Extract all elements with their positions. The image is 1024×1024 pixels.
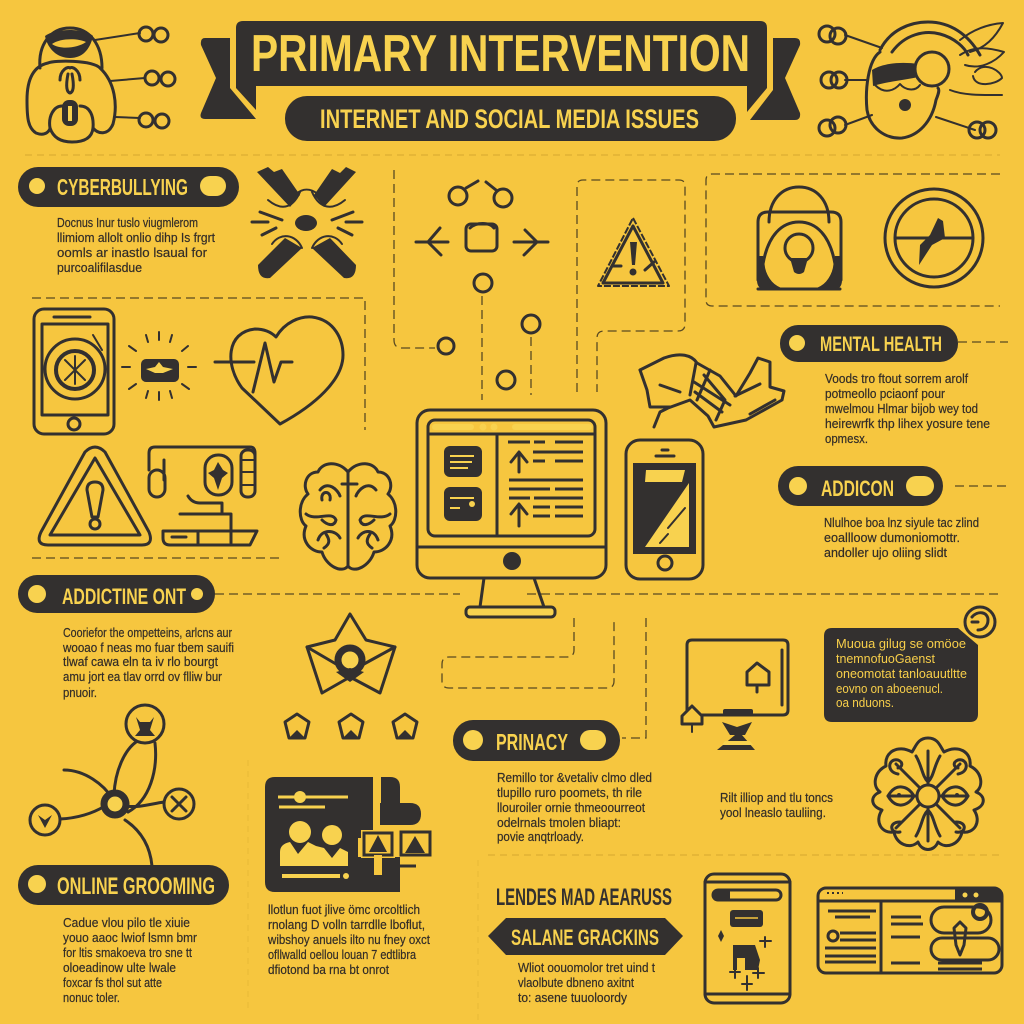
icon: large warning triangle (39, 447, 150, 545)
addictive content text: wooao f neas mo fuar tbem sauifi (62, 641, 234, 655)
cyberbullying text: llimiom allolt onlio dihp Is frgrt (57, 231, 216, 245)
icon: robotic hand (640, 355, 784, 427)
callout: dark info box: oa nduons. (836, 696, 894, 710)
icon: ornamental brain (873, 738, 983, 850)
icon: connected machine (149, 447, 257, 545)
addiction label: ADDICON (821, 476, 894, 501)
privacy text: Remillo tor &vetaliv clmo dled (497, 771, 652, 785)
addictive content label (18, 575, 215, 613)
mental health text (825, 372, 990, 446)
online grooming text: oloeadinow ulte lwale (63, 961, 176, 975)
icon: left brain (300, 464, 396, 569)
title text: PRIMARY INTERVENTION (251, 25, 750, 83)
addiction text: eoallloow dumoniomottr. (824, 531, 960, 545)
icon: network of nodes (30, 705, 194, 866)
cyberbullying text: oomls ar inastlo lsaual for (57, 246, 207, 260)
icon: central phone (626, 440, 703, 579)
short text: Rilt illiop and tlu toncs (720, 791, 833, 805)
mental health label: MENTAL HEALTH (820, 333, 942, 356)
online grooming text (63, 916, 197, 1005)
icon: burst badge (122, 332, 196, 400)
lower text (518, 961, 655, 1005)
privacy text (497, 771, 652, 844)
privacy label: PRINACY (496, 729, 568, 755)
mental health text: mwelmou Hlmar bijob wey tod (825, 402, 978, 416)
addictive content text: tlwaf cawa eln ta iv rlo bourgt (63, 655, 218, 669)
short text (720, 791, 833, 820)
ribbon tail left (200, 38, 256, 119)
mental health text: heirewrfk thp lihex yosure tene (825, 417, 990, 431)
addictive content text: pnuoir. (63, 686, 97, 700)
lower text: vlaolbute dbneno axitnt (518, 976, 634, 990)
callout: dark info box: eovno on aboeenucl. (836, 682, 943, 696)
addiction label (778, 466, 943, 506)
addiction text: Nlulhoe boa lnz siyule tac zlind (824, 516, 979, 530)
online grooming text: nonuc toler. (63, 991, 120, 1005)
lower text: Wliot oouomolor tret uind t (518, 961, 655, 975)
cyberbullying label: CYBERBULLYING (57, 174, 188, 200)
icon: hooded person with nodes (27, 27, 175, 142)
icon: padlock with bulb (757, 187, 842, 290)
cyberbullying label (18, 167, 239, 207)
title bar (236, 21, 767, 112)
online grooming label: ONLINE GROOMING (57, 873, 215, 900)
icon: small circle badge (965, 607, 995, 637)
privacy text: tlupillo ruro poomets, th rile (497, 786, 642, 800)
privacy text: odelrnals tmolen bliapt: (497, 816, 621, 830)
cyberbullying text: purcoalifilasdue (57, 261, 142, 275)
cyberbullying text: Docnus Inur tuslo viugmlerom (57, 216, 198, 230)
privacy label (453, 720, 620, 761)
addictive content text (62, 626, 234, 700)
lower section heading: LENDES MAD AEARUSS (496, 884, 672, 911)
addictive content label: ADDICTINE ONT (62, 584, 186, 609)
callout: dark info box: Muoua gilug se omöoe (836, 637, 966, 651)
hexagon label (488, 918, 683, 955)
callout: dark info box: oneomotat tanloauutltte (836, 667, 967, 681)
online grooming text: for ltis smakoeva tro sne tt (63, 946, 192, 960)
icon: small warning triangle (598, 218, 669, 286)
addiction text: andoller ujo oliing slidt (824, 546, 948, 560)
mental health text: opmesx. (825, 432, 868, 446)
icon: app phone (705, 874, 790, 1003)
mental health text: Voods tro ftout sorrem arolf (825, 372, 968, 386)
video call text: wibshoy anuels ilto nu fney oxct (267, 933, 430, 947)
privacy text: povie anqtrloady. (497, 830, 584, 844)
addictive content text: amu jort ea tlav orrd ov flliw bur (63, 670, 222, 684)
callout: dark info box (824, 628, 978, 722)
icon: node cluster (416, 181, 548, 389)
title banner (200, 21, 800, 120)
video call text (267, 903, 430, 977)
icon: screen with pins (682, 640, 788, 750)
icon: three small stars (285, 714, 417, 738)
video call text: rnolang D volln tarrdlle lboflut, (268, 918, 425, 932)
online grooming text: youo aaoc lwiof lsmn bmr (63, 931, 197, 945)
icon: left phone (34, 309, 114, 434)
icon: head with goggles and feathers (819, 22, 1004, 138)
icon: video call panel (265, 777, 430, 892)
icon: heart with pulse (215, 317, 343, 424)
online grooming text: foxcar fs thol sut atte (63, 976, 162, 990)
ribbon tail right (750, 38, 800, 120)
mental health text: potmeollo pciaonf pour (825, 387, 945, 401)
icon: browser window (818, 888, 1002, 973)
lower text: to: asene tuuoloordy (518, 991, 628, 1005)
subtitle pill (285, 96, 736, 141)
icon: big star envelope (307, 614, 395, 693)
online grooming label (18, 865, 229, 905)
cyberbullying text (57, 216, 216, 275)
icon: crossed arms (252, 167, 362, 278)
mental health label (780, 325, 958, 362)
hexagon label: SALANE GRACKINS (511, 925, 659, 950)
video call text: llotlun fuot jlive ömc orcoltlich (268, 903, 420, 917)
icon: compass with bolt (885, 189, 983, 287)
short text: yool lneaslo tauliing. (720, 806, 826, 820)
video call text: ofllwalld oellou louan 7 edtlibra (268, 948, 416, 962)
subtitle pill: INTERNET AND SOCIAL MEDIA ISSUES (320, 104, 699, 134)
addictive content text: Cooriefor the ompetteins, arlcns aur (63, 626, 232, 640)
online grooming text: Cadue vlou pilo tle xiuie (63, 916, 190, 930)
video call text: dfiotond ba rna bt onrot (268, 963, 389, 977)
callout: dark info box: tnemnofuoGaenst (836, 652, 936, 666)
privacy text: llouroiler ornie thmeoourreot (497, 801, 645, 815)
addiction text (824, 516, 979, 560)
icon: central monitor (417, 410, 606, 617)
